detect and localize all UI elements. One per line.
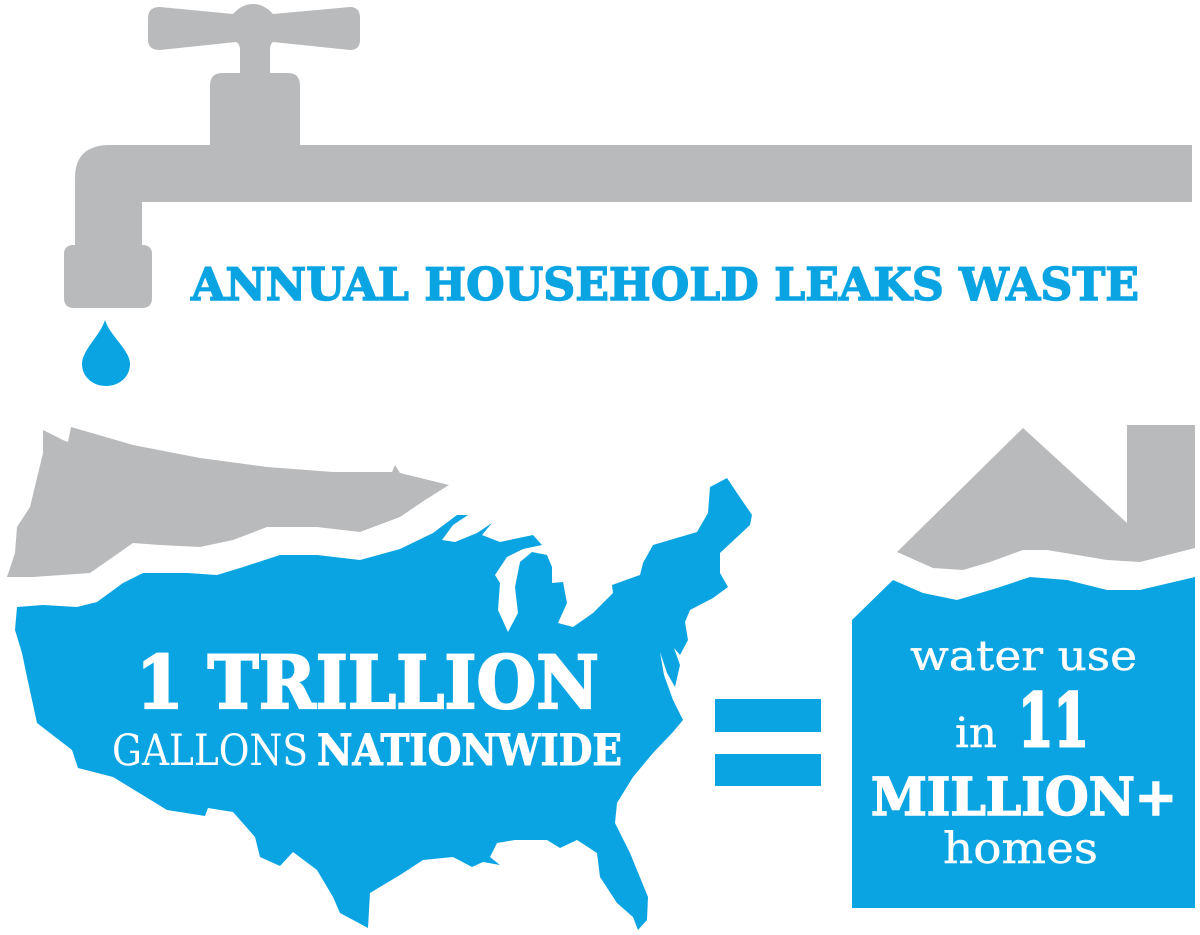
house text: in 11: in [955,709,997,757]
panel: blue house [852,577,1195,908]
map text: gallons nationwide: GALLONS [112,726,308,776]
house text: million+: MILLION+ [871,767,1177,828]
equals sign [715,699,821,786]
map: gray unfilled upper part of USA [7,427,449,577]
house text: in 11 [955,678,1089,764]
heading: ANNUAL HOUSEHOLD LEAKS WASTE [190,258,1139,311]
map text: gallons nationwide [112,726,622,776]
map: blue water-filled USA [15,478,752,930]
house text: water use: water use [910,632,1137,680]
icon: water drop [82,320,130,386]
house text: homes: homes [943,824,1098,874]
house text: in 11: 11 [1018,678,1089,764]
map text: 1 trillion: 1 TRILLION [136,640,599,726]
icon: gray house roof [897,425,1195,570]
map text: gallons nationwide: NATIONWIDE [317,726,622,776]
icon: faucet [64,4,1192,308]
